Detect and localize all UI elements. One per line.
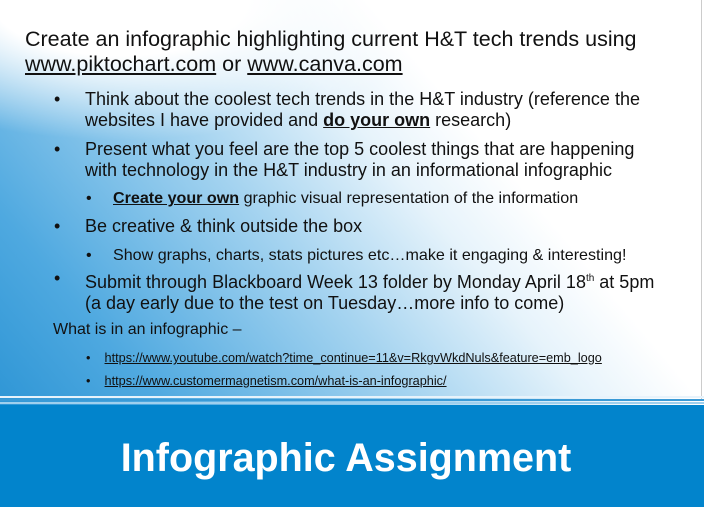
sub bullet bbox=[86, 189, 578, 207]
bullet list: Think about the coolest tech trends in the H&T industry (reference the bbox=[85, 89, 640, 109]
sub bullet: • bbox=[86, 189, 92, 207]
title text: Create an infographic highlighting current H&T tech trends using bbox=[25, 27, 637, 51]
what is infographic: What is in an infographic – bbox=[53, 321, 242, 338]
title text: www.piktochart.com or www.canva.com bbox=[25, 52, 403, 76]
banner bbox=[0, 405, 704, 507]
bullet list: Present what you feel are the top 5 coolest things that are happening bbox=[85, 139, 634, 159]
links: • https://www.customermagnetism.com/what-is-an-infographic/ bbox=[86, 374, 447, 388]
bullet list: with technology in the H&T industry in an informational infographic bbox=[85, 160, 612, 180]
bullet 1 bbox=[54, 89, 640, 130]
bullet 2: • bbox=[54, 139, 60, 159]
links bbox=[86, 351, 602, 388]
sub bullet 2 bbox=[86, 246, 626, 264]
links: • https://www.youtube.com/watch?time_continue=11&v=RkgvWkdNuls&feature=emb_logo bbox=[86, 351, 602, 365]
bullet 1: • bbox=[54, 89, 60, 109]
bullet 4: • bbox=[54, 268, 60, 288]
bullet list: websites I have provided and do your own research) bbox=[85, 110, 511, 130]
bullet 3 bbox=[54, 216, 362, 236]
bullet list bbox=[54, 89, 654, 313]
bullet list: Show graphs, charts, stats pictures etc…make it engaging & interesting! bbox=[113, 246, 626, 264]
bullet 3: • bbox=[54, 216, 60, 236]
bullet list: Create your own graphic visual representation of the information bbox=[113, 189, 578, 207]
right border bbox=[701, 0, 704, 400]
bullet list: Submit through Blackboard Week 13 folder by Monday April 18th at 5pm bbox=[85, 272, 654, 292]
bullet list: (a day early due to the test on Tuesday…more info to come) bbox=[85, 293, 564, 313]
bullet 4 bbox=[54, 268, 654, 313]
divider lines bbox=[0, 396, 704, 398]
title text bbox=[25, 27, 637, 76]
bullet list: Be creative & think outside the box bbox=[85, 216, 362, 236]
banner title: Infographic Assignment bbox=[121, 436, 571, 480]
bullet 2 bbox=[54, 139, 634, 180]
sub bullet 2: • bbox=[86, 246, 92, 264]
